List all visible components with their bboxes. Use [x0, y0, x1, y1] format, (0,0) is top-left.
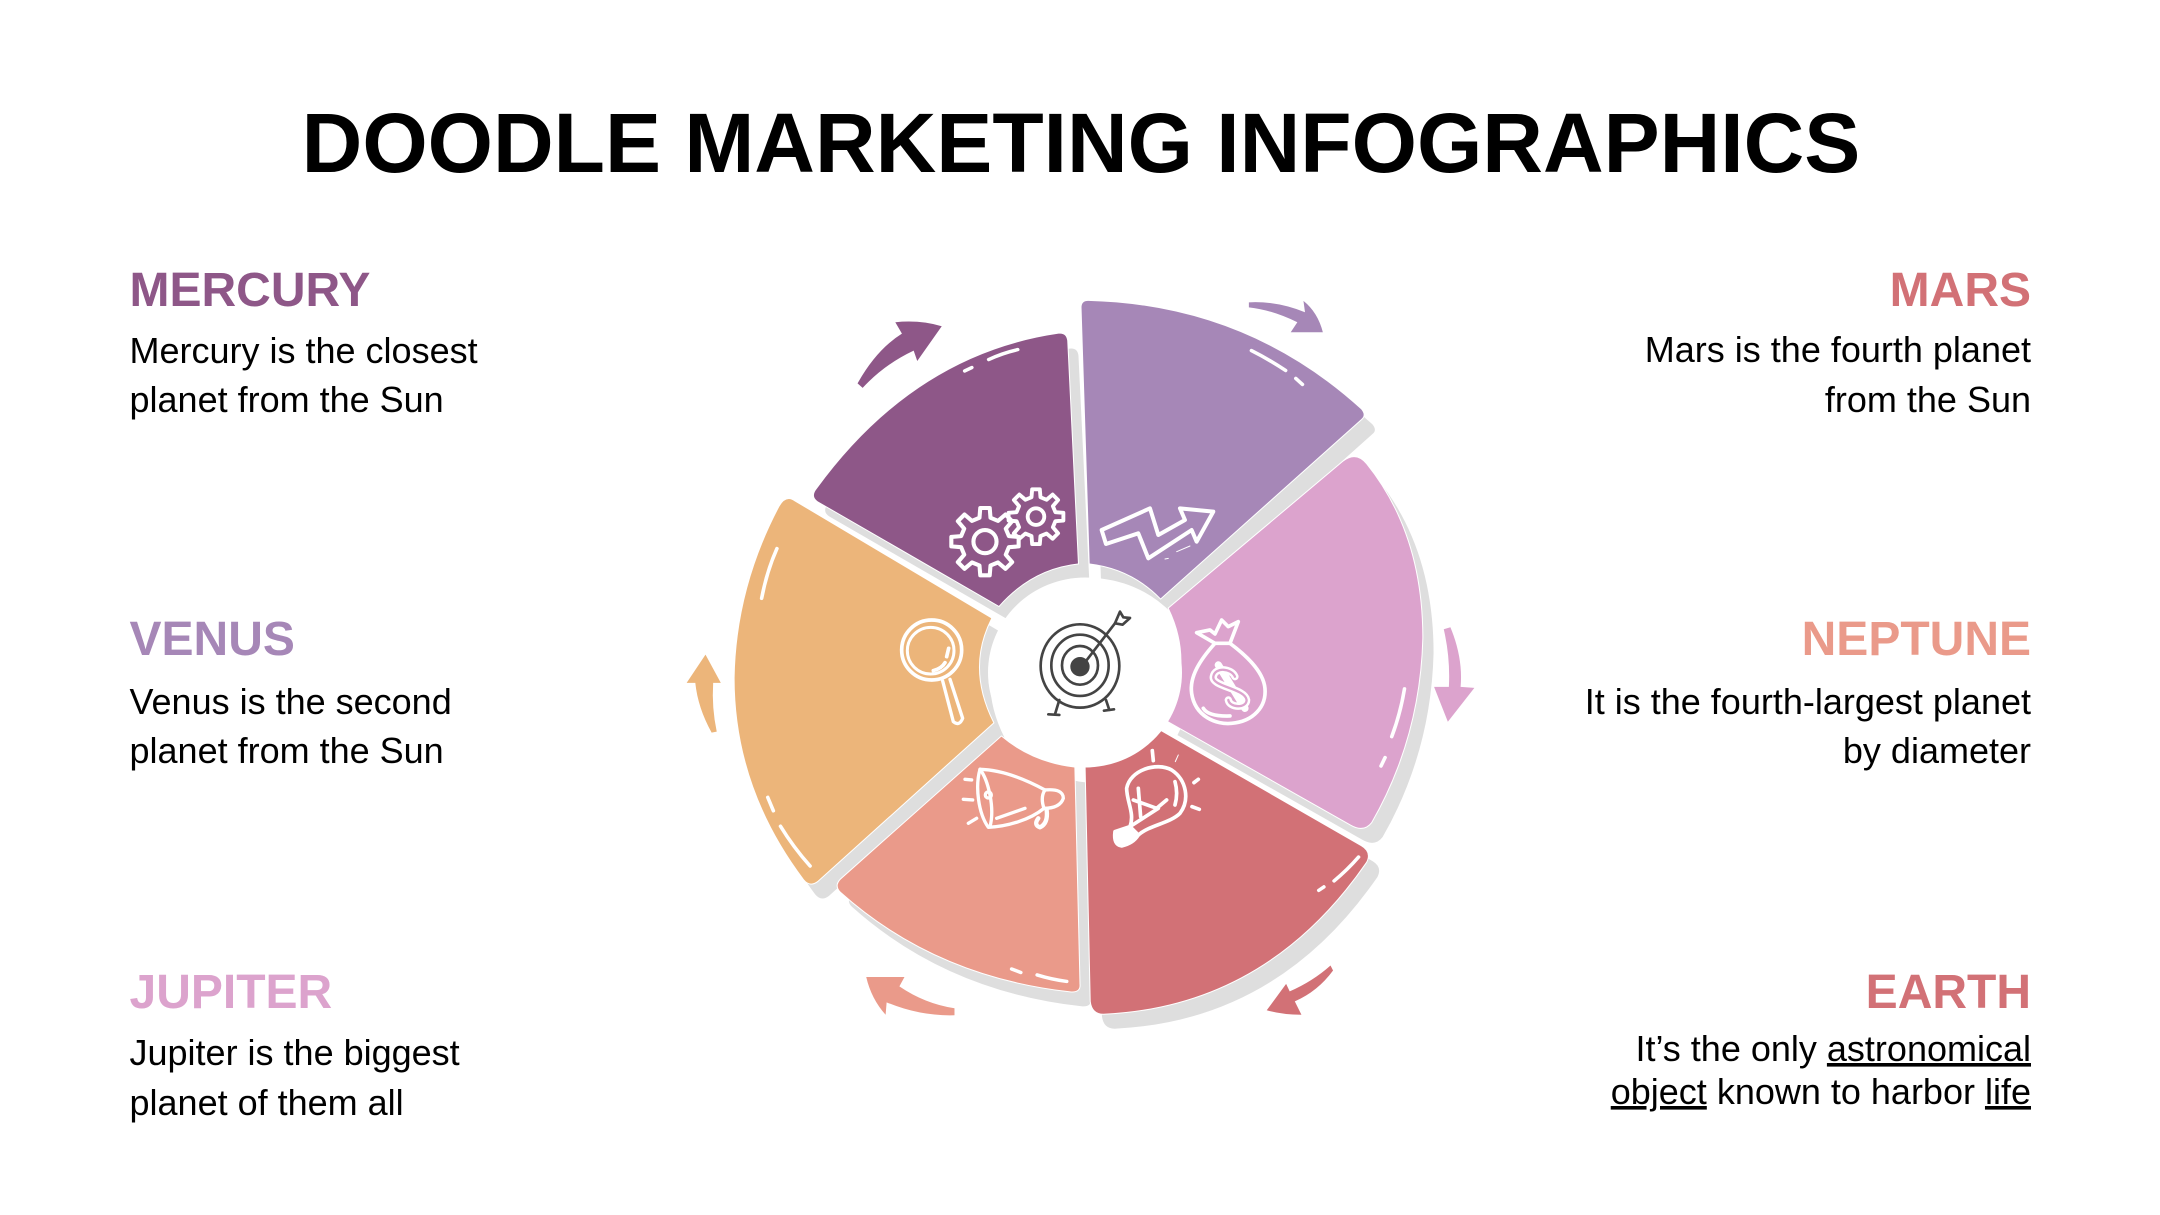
text block: Mercury: [130, 264, 478, 420]
text block: Neptune: by diameter: [1843, 730, 2031, 771]
segment: Mars: [1082, 301, 1364, 598]
text block: Mars: MARS: [1890, 264, 2031, 317]
text block: Neptune: NEPTUNE: [1802, 613, 2031, 666]
text block: Neptune: [1585, 613, 2031, 771]
segment: Neptune: [838, 737, 1080, 991]
arrow: Venus: [687, 655, 721, 733]
segment highlights: [762, 350, 1404, 981]
icon: gears: [951, 489, 1063, 575]
icon: zigzag arrow: [1102, 508, 1213, 559]
icon: target with arrow: [1041, 612, 1130, 715]
icon: light bulb: [1115, 751, 1199, 846]
arrow: Mercury: [858, 322, 942, 388]
segment: Venus: [735, 499, 993, 884]
text block: Earth: [1611, 966, 2031, 1112]
title: DOODLE MARKETING INFOGRAPHICS: [302, 96, 1860, 190]
text block: Venus: planet from the Sun: [130, 730, 444, 771]
text block: Mars: Mars is the fourth planet: [1645, 329, 2031, 370]
text block: Mars: from the Sun: [1825, 379, 2031, 420]
text block: Earth: EARTH: [1866, 966, 2031, 1019]
text block: Neptune: It is the fourth-largest planet: [1585, 681, 2031, 722]
arrow: Jupiter: [1434, 627, 1474, 722]
text block: Jupiter: [130, 966, 460, 1123]
text block: Jupiter: Jupiter is the biggest: [130, 1032, 460, 1073]
text block: Jupiter: JUPITER: [130, 966, 332, 1019]
text block: Mercury: Mercury is the closest: [130, 330, 478, 371]
arrow: Earth: [1267, 966, 1333, 1015]
icon: magnifying glass: [902, 620, 963, 724]
segment: Mercury: [814, 334, 1078, 606]
arrow: Mars: [1249, 301, 1323, 332]
wheel shadows: [746, 316, 1434, 1029]
center circle: [988, 578, 1182, 768]
text block: Venus: VENUS: [130, 613, 295, 666]
arrow: Neptune: [866, 977, 954, 1015]
wheel diagram: [687, 301, 1474, 1029]
text block: Mars: [1645, 264, 2031, 420]
text block: Venus: Venus is the second: [130, 681, 452, 722]
icon: megaphone: [963, 769, 1063, 827]
text block: Earth: It’s the only astronomical: [1635, 1028, 2031, 1069]
text block: Jupiter: planet of them all: [130, 1082, 404, 1123]
text block: Venus: [130, 613, 452, 771]
segment: Earth: [1086, 730, 1368, 1014]
text block: Earth: object known to harbor life: [1611, 1071, 2031, 1112]
text block: Mercury: planet from the Sun: [130, 379, 444, 420]
text block: Mercury: MERCURY: [130, 264, 370, 317]
segment: Jupiter: [1166, 457, 1422, 828]
icon: money bag: [1191, 620, 1265, 724]
